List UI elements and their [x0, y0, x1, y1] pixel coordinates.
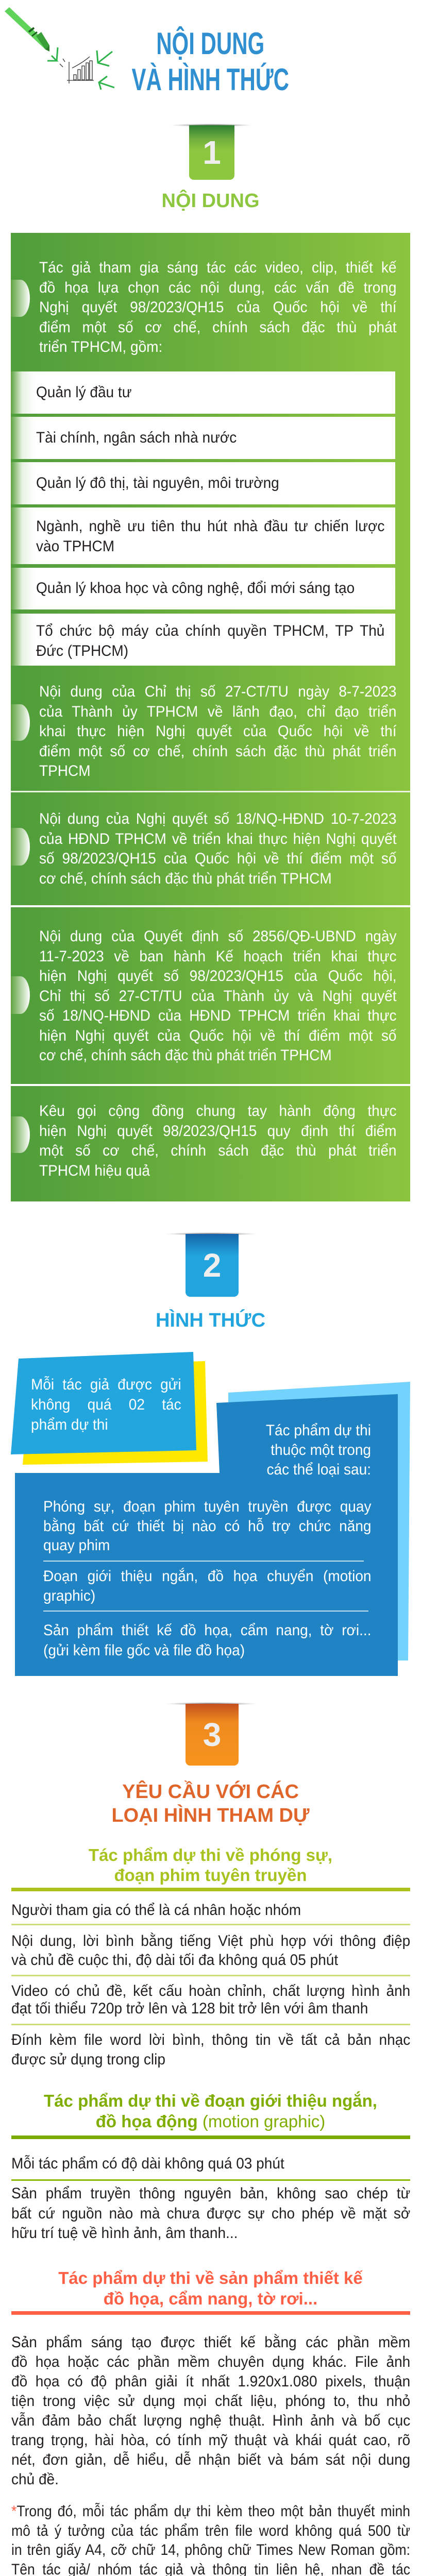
block: kêu gọi: hiện Nghị quyết 98/2023/QH15 quy định thí điểm	[39, 1122, 397, 1140]
row: đầu tư: Quản lý đầu tư	[36, 384, 131, 401]
row: khoa học: Quản lý khoa học và công nghệ, đổi mới sáng tạo	[36, 580, 355, 597]
subheading: thiết kế: đồ họa, cẩm nang, tờ rơi...	[104, 2289, 317, 2308]
list: motion graphic requirements: hữu trí tuệ về hình ảnh, âm thanh...	[11, 2225, 238, 2242]
heading: HÌNH THỨC: HÌNH THỨC	[156, 1310, 265, 1331]
footnote: in trên giấy A4, cỡ chữ 14, phông chữ Times New Roman gồm:	[11, 2541, 410, 2558]
intro text	[11, 259, 397, 355]
text: thiết kế requirements: đồ họa hoặc các phần mềm chuyên dụng khác. File ảnh	[11, 2353, 410, 2370]
block: quyết định 2856: cơ chế, chính sách đặc thù phát triển TPHCM	[39, 1047, 332, 1064]
intro text: triển TPHCM, gồm:	[39, 338, 162, 355]
heading: yêu cầu	[111, 1781, 310, 1826]
text: thiết kế requirements: đồ họa có độ phân giải ít nhất 1.920x1.080 pixels, thuận	[11, 2373, 410, 2390]
block: quyết định 2856: 11-7-2023 về ban hành Kế hoạch triển khai thực	[39, 948, 397, 964]
list: phóng sự requirements: và chủ đề cuộc thi, độ dài tối đa không quá 05 phút	[11, 1952, 338, 1969]
icon: green crayon with chart	[5, 7, 114, 90]
list: phóng sự requirements: đạt tối thiểu 720p trở lên và 128 bit trở lên với âm thanh	[11, 2000, 368, 2017]
badge 1: 1	[203, 134, 221, 171]
subheading: motion graphic: đồ họa động (motion graphic)	[96, 2112, 325, 2131]
list: motion graphic requirements	[11, 2155, 410, 2242]
item: motion graphic: graphic)	[43, 1587, 95, 1604]
block: nghị quyết 18	[11, 810, 397, 887]
block: chỉ thị 27: khai thực hiện Nghị quyết của Quốc hội về thí	[39, 723, 397, 740]
block: nghị quyết 18: cơ chế, chính sách đặc thù phát triển TPHCM	[39, 870, 332, 887]
footnote: mô tả ý tưởng của tác phẩm trên file word không quá 500 từ	[11, 2522, 410, 2539]
block: chỉ thị 27: của Thành ủy TPHCM về lãnh đạo, chỉ đạo triển	[39, 703, 397, 720]
block: quyết định 2856: Nội dung của Quyết định số 2856/QĐ-UBND ngày	[39, 928, 397, 945]
block: quyết định 2856: hiện Nghị quyết số 98/2023/QH15 của Quốc hội,	[39, 968, 397, 985]
text: mỗi tác giả: Mỗi tác giả được gửi	[31, 1376, 181, 1393]
badge 3: 3	[203, 1716, 221, 1753]
block: kêu gọi: TPHCM hiệu quả	[39, 1162, 150, 1179]
card: thể loại	[15, 1382, 410, 1676]
title: NỘI DUNG	[157, 26, 265, 61]
subheading: thiết kế: Tác phẩm dự thi về sản phẩm thiết kế	[58, 2268, 363, 2287]
text: thiết kế requirements: vẫn đảm bảo chất lượng nghệ thuật. Hình ảnh và bố cục	[11, 2412, 410, 2429]
block: nghị quyết 18: của HĐND TPHCM về triển khai thực hiện Nghị quyết	[39, 831, 397, 847]
text: mỗi tác giả: không quá 02 tác	[31, 1396, 181, 1413]
footnote: *Trong đó, mỗi tác phẩm dự thi kèm theo một bản thuyết minh	[11, 2503, 410, 2520]
block: quyết định 2856: hiện Nghị quyết của Quốc hội về thí điểm một số	[39, 1027, 397, 1044]
panel: nội dung	[11, 233, 410, 1201]
block: quyết định 2856: số 18/NQ-HĐND của HĐND TPHCM triển khai thực	[39, 1007, 397, 1024]
block: quyết định 2856	[11, 928, 397, 1064]
title	[132, 26, 289, 97]
item: phóng sự: Phóng sự, đoạn phim tuyên truyền được quay	[43, 1498, 371, 1515]
list: motion graphic requirements: Mỗi tác phẩm có độ dài không quá 03 phút	[11, 2155, 284, 2172]
text: thiết kế requirements: chủ đề.	[11, 2471, 59, 2488]
text: mỗi tác giả	[31, 1376, 181, 1433]
block: kêu gọi: một số cơ chế, chính sách đặc thù phát triển	[39, 1142, 397, 1159]
list: motion graphic requirements: bất cứ nguồn nào mà chưa được sự cho phép về mặt sở	[11, 2205, 410, 2222]
list: motion graphic requirements: Sản phẩm truyền thông nguyên bản, không sao chép từ	[11, 2185, 410, 2202]
item: thiết kế: (gửi kèm file gốc và file đồ họa)	[43, 1642, 245, 1659]
title: VÀ HÌNH THỨC	[132, 62, 289, 97]
text: thiết kế requirements: Sản phẩm sáng tạo được thiết kế bằng các phần mềm	[11, 2334, 410, 2351]
item: thiết kế	[43, 1622, 371, 1659]
block: kêu gọi	[11, 1103, 397, 1179]
text: thể loại heading: Tác phẩm dự thi	[266, 1422, 371, 1439]
item: thiết kế: Sản phẩm thiết kế đồ họa, cẩm nang, tờ rơi...	[43, 1622, 371, 1639]
text: thiết kế requirements: trang trọng, hài hòa, có tính mỹ thuật và khái quát cao, rõ	[11, 2432, 410, 2449]
item: phóng sự: quay phim	[43, 1537, 110, 1554]
text: thiết kế requirements	[11, 2334, 410, 2488]
subheading: phóng sự: Tác phẩm dự thi về phóng sự,	[89, 1845, 332, 1865]
row: khoa học	[11, 568, 395, 609]
text: thể loại heading: thuộc một trong	[271, 1442, 371, 1459]
block: nghị quyết 18: Nội dung của Nghị quyết số 18/NQ-HĐND 10-7-2023	[39, 810, 397, 827]
row: đô thị	[11, 462, 395, 504]
text: thiết kế requirements: nét, đơn giản, dễ hiểu, dễ nhận biết và bám sát nội dung	[11, 2451, 410, 2468]
block: chỉ thị 27: Nội dung của Chỉ thị số 27-CT/TU ngày 8-7-2023	[39, 683, 397, 700]
row: tổ chức bộ máy	[11, 614, 395, 666]
card: mỗi tác giả	[11, 1352, 208, 1465]
text: thiết kế requirements: tiện trong việc sử dụng mọi chất liệu, phóng to, thu nhỏ	[11, 2393, 410, 2410]
block: kêu gọi: Kêu gọi cộng đồng chung tay hành động thực	[39, 1103, 397, 1120]
block: chỉ thị 27: TPHCM	[39, 762, 91, 779]
list: phóng sự requirements	[11, 1902, 410, 2068]
list: phóng sự requirements: Người tham gia có thể là cá nhân hoặc nhóm	[11, 1902, 301, 1919]
list: phóng sự requirements: Nội dung, lời bình bằng tiếng Việt phù hợp với thông điệp	[11, 1933, 410, 1950]
row: đô thị: Quản lý đô thị, tài nguyên, môi trường	[36, 474, 279, 492]
text: thể loại heading	[266, 1422, 371, 1478]
heading: yêu cầu: YÊU CẦU VỚI CÁC	[122, 1781, 299, 1803]
item: motion graphic	[43, 1568, 371, 1604]
subheading: thiết kế	[58, 2268, 363, 2308]
badge 1	[173, 124, 249, 180]
subheading: motion graphic	[44, 2091, 377, 2131]
block: nghị quyết 18: số 98/2023/QH15 của Quốc hội về thí điểm một số	[39, 850, 397, 867]
row: ngành nghề: Ngành, nghề ưu tiên thu hút nhà đầu tư chiến lược	[36, 518, 384, 535]
row: ngành nghề	[11, 507, 395, 564]
block: chỉ thị 27	[11, 683, 397, 779]
text: thể loại heading: các thể loại sau:	[266, 1461, 371, 1478]
row: ngành nghề: vào TPHCM	[36, 538, 114, 554]
text: mỗi tác giả: phẩm dự thi	[31, 1416, 108, 1433]
item: phóng sự: bằng bất cứ thiết bị nào có hỗ trợ chức năng	[43, 1518, 371, 1534]
footnote	[11, 2503, 410, 2576]
intro text: điểm một số cơ chế, chính sách đặc thù phát	[39, 318, 397, 336]
block: quyết định 2856: Chỉ thị số 27-CT/TU của Thành ủy và Nghị quyết	[39, 987, 397, 1005]
intro text: đồ họa lựa chọn các nội dung, các vấn đề trong	[39, 279, 397, 296]
subheading: phóng sự: đoạn phim tuyên truyền	[114, 1866, 307, 1885]
badge 2	[168, 1232, 255, 1297]
subheading: phóng sự	[89, 1845, 332, 1885]
list: phóng sự requirements: Đính kèm file word lời bình, thông tin về tất cả bản nhạc	[11, 2031, 410, 2048]
badge 2: 2	[203, 1247, 221, 1284]
row: tổ chức bộ máy: Đức (TPHCM)	[36, 642, 128, 659]
badge 3	[168, 1702, 255, 1766]
item: motion graphic: Đoạn giới thiệu ngắn, đồ họa chuyển (motion	[43, 1568, 371, 1585]
block: chỉ thị 27: điểm một số cơ chế, chính sách đặc thù phát triển	[39, 743, 397, 759]
list: thể loại	[43, 1498, 371, 1659]
row: tài chính	[11, 417, 395, 459]
intro text: Tác giả tham gia sáng tác các video, clip, thiết kế	[39, 259, 397, 276]
panel: hình thức	[11, 1352, 410, 1676]
list: phóng sự requirements: được sử dụng trong clip	[11, 2051, 165, 2068]
row: tài chính: Tài chính, ngân sách nhà nước	[36, 429, 237, 446]
heading: yêu cầu: LOẠI HÌNH THAM DỰ	[111, 1805, 310, 1826]
item: phóng sự	[43, 1498, 371, 1554]
list: phóng sự requirements: Video có chủ đề, kết cấu hoàn chỉnh, chất lượng hình ảnh	[11, 1982, 410, 1999]
intro text: Nghị quyết 98/2023/QH15 của Quốc hội về thí	[39, 299, 397, 316]
row: tổ chức bộ máy: Tổ chức bộ máy của chính quyền TPHCM, TP Thủ	[36, 622, 384, 639]
row: đầu tư	[11, 371, 395, 414]
heading: NỘI DUNG: NỘI DUNG	[162, 190, 260, 212]
subheading: motion graphic: Tác phẩm dự thi về đoạn giới thiệu ngắn,	[44, 2091, 377, 2110]
